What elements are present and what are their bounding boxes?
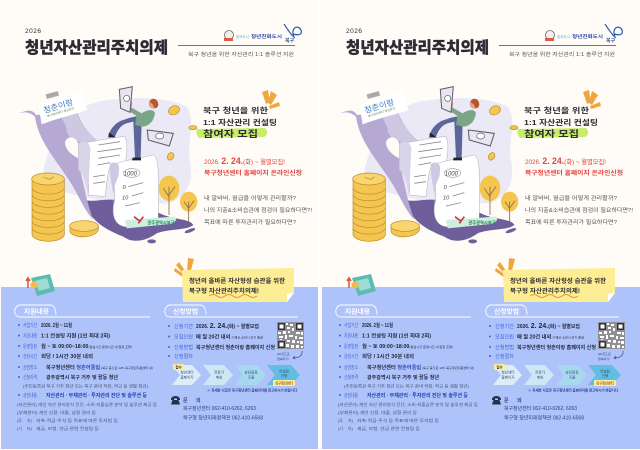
step 1	[493, 364, 522, 385]
step 2: 전문가	[535, 370, 546, 374]
section heading: support details: 지원내용	[345, 306, 370, 316]
QR code	[277, 322, 304, 349]
support detail rows: (부채관리) 개인 신용, 대출, 상환 관리 등	[17, 410, 97, 415]
poster: right copy	[320, 0, 640, 450]
step 2	[203, 365, 233, 385]
support detail rows: (주민등록상 북구 거주 청년 또는 북구 관내 직장, 학교 등 생활 청년)	[344, 384, 470, 388]
section heading: how to apply: 신청방법	[494, 306, 519, 316]
illustration: person on receipts with coins: 1000	[445, 172, 459, 178]
support detail rows: 광주광역시 북구 거주 및 활동 청년	[367, 374, 439, 381]
floating coins	[488, 104, 502, 117]
handwritten questions: 목표에 따른 투자관리가 필요하다면?	[204, 218, 296, 226]
support detail rows: 상담내용	[344, 392, 358, 399]
illustration: person on receipts with coins: 광주광역시북구	[147, 219, 175, 226]
step 4	[588, 365, 621, 386]
yellow callout note: 북구형 자산관리주치의제!	[189, 287, 259, 295]
step 4: 북구청년센터	[596, 380, 614, 386]
red date and application text: 북구청년센터 홈페이지 온라인신청	[204, 169, 302, 177]
support detail rows: 자산관리 · 부채관리 · 투자관리 진단 및 솔루션 등	[46, 392, 147, 399]
intro heading: 1:1 자산관리 컨설팅	[524, 117, 598, 127]
application rows: 신청기간	[174, 323, 193, 330]
section heading: support details: 지원내용	[24, 306, 49, 316]
poster: left copy	[0, 0, 318, 450]
illustration: person on receipts with coins	[18, 87, 197, 243]
support detail rows: 신청자격	[344, 374, 358, 381]
red date and application text	[525, 156, 623, 177]
contact block: 북구청년센터 062-410-6262, 6263	[183, 405, 256, 412]
QR caption and arrow	[598, 351, 623, 361]
yellow callout note: 청년의 올바른 자산형성 습관을 위한	[510, 277, 607, 285]
section: how to apply	[486, 305, 625, 422]
support detail rows: 세금, 보험, 연금 관련 컨설팅 등	[36, 426, 100, 431]
support detail rows: (자산관리) 개인 자산 관리방식 진단, 소비·지출습관 분석 및 솔루션 제공 등	[338, 402, 478, 407]
red date and application text: 2026. 2. 24.(화) ~ 월별모집!	[204, 156, 285, 166]
QR caption and arrow: QR코드로	[277, 352, 290, 356]
support detail rows: 월 ~ 토 09:00~18:00 (점심시간 운영시간 내 일정 조율)	[41, 343, 132, 350]
support detail rows: 상담장소	[23, 364, 37, 371]
section heading: support details	[336, 305, 471, 317]
section: how to apply	[165, 305, 304, 422]
step 1: 접수	[496, 364, 503, 370]
single coin	[70, 221, 98, 237]
step 4: 북구청년센터	[275, 380, 293, 386]
application rows: 신청절차	[174, 353, 193, 360]
floating banknote	[147, 130, 173, 146]
step 1: 청년센터	[180, 370, 194, 374]
intro heading: 북구 청년을 위한	[203, 105, 268, 115]
contact block: 문	[183, 398, 188, 404]
step 1	[172, 364, 201, 385]
application rows: 2026. 2. 24.(화) ~ 월별모집	[517, 323, 580, 330]
support detail rows: 자산관리 · 부채관리 · 투자관리 진단 및 솔루션 등	[367, 392, 468, 399]
subtitle: 북구 청년을 위한 자산관리 1:1 솔루션 지원	[509, 51, 615, 58]
red date and application text: 북구청년센터 홈페이지 온라인신청	[525, 169, 623, 177]
illustration: person on receipts with coins: 10	[443, 195, 450, 201]
step 1: 홈페이지	[501, 374, 515, 380]
blue info panel	[322, 287, 640, 449]
front receipt	[110, 155, 159, 227]
stack of coins	[353, 173, 385, 241]
floor drops	[468, 239, 477, 243]
application rows: 모집인원	[495, 334, 514, 340]
trees	[159, 176, 179, 201]
raised banknote	[119, 87, 132, 112]
orange burst over note	[174, 258, 194, 278]
application rows	[168, 323, 275, 360]
application rows: 신청기간	[495, 323, 514, 330]
section heading: support details	[15, 305, 150, 317]
red date and application text	[204, 156, 302, 177]
support detail rows: 운영일정	[23, 343, 37, 350]
icon: map and coin	[347, 274, 376, 296]
handwritten questions: 내 알바비, 월급을 어떻게 관리할까?	[204, 194, 296, 202]
stack of coins	[32, 173, 64, 241]
application rows	[489, 323, 596, 360]
step 4: 컨설팅	[600, 368, 610, 374]
yellow callout note: 청년의 올바른 자산형성 습관을 위한	[189, 277, 286, 285]
support detail rows: 북구청년센터 청춘어울림 (북구 중흥로 125, 북구청년지원센터 내)	[367, 364, 474, 371]
contact block: 문	[504, 398, 509, 404]
intro heading: 참여자 모집	[203, 128, 258, 139]
orange burst over note	[495, 258, 515, 278]
step 3: 상담일정	[244, 370, 258, 374]
support detail rows: 자)	[27, 418, 33, 423]
support detail rows: 1:1 컨설팅 지원 (1인 최대 2회)	[362, 332, 431, 340]
support detail rows: 운영일정	[344, 343, 358, 350]
handwritten questions	[525, 194, 634, 226]
yellow callout note	[182, 268, 294, 302]
section: support details	[15, 305, 157, 431]
application rows: 신청방법	[174, 344, 193, 351]
support detail rows: 회당 / 1시간 30분 내외	[362, 353, 414, 360]
logo: youth city Buk-gu: 빛의도시	[557, 34, 570, 39]
floating banknote	[468, 130, 494, 146]
support detail rows: (기	[17, 426, 22, 431]
floor drops	[147, 239, 156, 243]
support detail rows: 사업기간	[23, 322, 37, 329]
step 4: 컨설팅	[279, 368, 289, 374]
header rule	[178, 44, 295, 47]
intro heading: 북구 청년을 위한	[524, 105, 589, 115]
year label: 2026	[346, 28, 362, 35]
handwritten questions: 목표에 따른 투자관리가 필요하다면?	[525, 218, 617, 226]
process chevrons	[493, 364, 621, 386]
support detail rows: 사업기간	[344, 322, 358, 329]
QR caption and arrow: 접속하기!	[277, 356, 289, 361]
support detail rows: 저축·적금·주식 등 목표에 따른 투자법 등	[36, 418, 119, 423]
floating coins	[167, 104, 181, 117]
title: 청년자산관리주치의제	[346, 38, 489, 57]
dark purple floor	[404, 200, 514, 241]
logo: youth city Buk-gu	[224, 24, 301, 44]
support detail rows: (자산관리) 개인 자산 관리방식 진단, 소비·지출습관 분석 및 솔루션 제공 등	[17, 402, 157, 407]
orange burst icon	[583, 90, 601, 109]
contact block	[504, 397, 584, 422]
support detail rows: (주민등록상 북구 거주 청년 또는 북구 관내 직장, 학교 등 생활 청년)	[23, 384, 149, 388]
logo: youth city Buk-gu: 빛의도시	[236, 34, 249, 39]
QR caption and arrow	[277, 351, 302, 361]
raised banknote	[440, 87, 453, 112]
support detail rows: 광주광역시 북구 거주 및 활동 청년	[46, 374, 118, 381]
support detail rows: (부채관리) 개인 신용, 대출, 상환 관리 등	[338, 410, 418, 415]
icon: telephone	[171, 396, 180, 404]
handwritten questions: 내 알바비, 월급을 어떻게 관리할까?	[525, 194, 617, 202]
note card: 북구청년센터 청년공간	[367, 105, 396, 118]
back receipt	[78, 137, 127, 197]
blue info panel	[1, 287, 318, 449]
handwritten questions: 나의 지출&소비습관에 점검이 필요하다면?!	[204, 206, 313, 214]
illustration: person on receipts with coins: 10	[122, 195, 129, 201]
title: 청년자산관리주치의제	[25, 38, 168, 57]
step 3: 조율	[248, 374, 255, 380]
red date and application text: 2026. 2. 24.(화) ~ 월별모집!	[525, 156, 606, 166]
QR caption and arrow: QR코드로	[598, 352, 611, 356]
handwritten questions	[204, 194, 313, 226]
back receipt	[399, 137, 448, 197]
step 4: 진행	[602, 373, 608, 378]
trees	[480, 176, 500, 201]
icon: map and coin	[26, 274, 55, 296]
support detail rows: 상담장소	[344, 364, 358, 371]
intro heading	[196, 105, 277, 139]
step 1: 청년센터	[501, 370, 515, 374]
logo: youth city Buk-gu: 북구	[606, 37, 616, 44]
application rows: 2026. 2. 24.(화) ~ 월별모집	[196, 323, 259, 330]
support detail rows: 타)	[27, 426, 33, 431]
support detail rows: 2026. 2월 ~ 11월	[362, 322, 393, 329]
step 1: 접수	[175, 364, 182, 370]
support detail rows: 자)	[348, 418, 354, 423]
support detail rows	[17, 322, 157, 431]
yellow callout note: 북구형 자산관리주치의제!	[510, 287, 580, 295]
support detail rows: 타)	[348, 426, 354, 431]
yellow callout note	[503, 268, 615, 302]
note card: 청춘이랑	[363, 97, 396, 115]
support detail rows	[338, 322, 478, 431]
step 1: 홈페이지	[180, 374, 194, 380]
application rows: 신청방법	[495, 344, 514, 351]
step 3	[235, 365, 266, 385]
illustration: person on receipts with coins	[339, 87, 518, 243]
support detail rows: 2026. 2월 ~ 11월	[41, 322, 72, 329]
illustration: person on receipts with coins: 0	[444, 185, 448, 191]
section: support details	[336, 305, 478, 431]
support detail rows: 북구청년센터 청춘어울림 (북구 중흥로 125, 북구청년지원센터 내)	[46, 364, 153, 371]
subtitle: 북구 청년을 위한 자산관리 1:1 솔루션 지원	[188, 51, 294, 58]
note card: 북구청년센터 청년공간	[46, 105, 75, 118]
front receipt	[431, 155, 480, 227]
logo: youth city Buk-gu: 북구	[285, 37, 295, 44]
illustration: person on receipts with coins: 광주광역시북구	[468, 219, 496, 226]
support detail rows: (투	[338, 418, 343, 423]
contact block: 의	[196, 397, 201, 404]
background blob	[43, 98, 191, 203]
purple paper ribbon	[18, 111, 98, 220]
application rows: 신청절차	[495, 353, 514, 360]
note card	[38, 90, 87, 124]
process footnote: ※ 자세한 사항은 북구청년센터 홈페이지를 참고하시기 바랍니다	[528, 388, 619, 392]
application rows: 북구청년센터 청춘이랑 홈페이지 신청	[517, 344, 596, 351]
person	[429, 116, 463, 158]
logo: youth city Buk-gu	[545, 24, 622, 44]
support detail rows: 저축·적금·주식 등 목표에 따른 투자법 등	[357, 418, 440, 423]
handwritten questions: 나의 지출&소비습관에 점검이 필요하다면?!	[525, 206, 634, 214]
support detail rows: 신청자격	[23, 374, 37, 381]
step 4: 진행	[281, 373, 287, 378]
orange burst icon	[262, 90, 280, 109]
step 2	[524, 365, 554, 385]
dark purple floor	[83, 200, 193, 241]
intro heading: 참여자 모집	[524, 128, 579, 139]
support detail rows: 1:1 컨설팅 지원 (1인 최대 2회)	[41, 332, 110, 340]
support detail rows: (기	[338, 426, 343, 431]
step 2: 매칭	[537, 374, 543, 380]
contact block: 의	[517, 397, 522, 404]
support detail rows: 월 ~ 토 09:00~18:00 (점심시간 운영시간 내 일정 조율)	[362, 343, 453, 350]
logo: youth city Buk-gu: 청년친화도시	[251, 33, 282, 40]
step 3: 상담일정	[565, 370, 579, 374]
purple paper ribbon	[339, 111, 419, 220]
step 4	[267, 365, 300, 386]
QR caption and arrow: 접속하기!	[598, 356, 610, 361]
contact block: 북구형 청년미래정책관 062-410-6568	[504, 414, 584, 422]
district banner	[446, 217, 497, 228]
support detail rows: (투	[17, 418, 22, 423]
support detail rows: 지원내용	[344, 332, 358, 340]
icon: telephone	[492, 396, 501, 404]
step 3	[556, 365, 587, 385]
district banner	[125, 217, 176, 228]
support detail rows: 상담내용	[23, 392, 37, 399]
contact block	[183, 397, 263, 422]
header rule	[499, 44, 616, 47]
support detail rows: 지원내용	[23, 332, 37, 340]
support detail rows: 회당 / 1시간 30분 내외	[41, 353, 93, 360]
person	[108, 116, 142, 158]
application rows: 매 월 20건 내외 ※예산 소진시 조기 종료	[196, 334, 263, 340]
QR code	[598, 322, 625, 349]
process footnote: ※ 자세한 사항은 북구청년센터 홈페이지를 참고하시기 바랍니다	[207, 388, 298, 392]
background blob	[364, 98, 512, 203]
intro heading	[517, 105, 598, 139]
section heading: how to apply: 신청방법	[173, 306, 198, 316]
support detail rows: 세금, 보험, 연금 관련 컨설팅 등	[357, 426, 421, 431]
note card	[359, 90, 408, 124]
application rows: 모집인원	[174, 334, 193, 340]
intro heading: 1:1 자산관리 컨설팅	[203, 117, 277, 127]
step 3: 조율	[569, 374, 576, 380]
support detail rows: 상담시간	[23, 353, 37, 360]
single coin	[391, 221, 419, 237]
process chevrons	[172, 364, 300, 386]
note card: 청춘이랑	[42, 97, 75, 115]
illustration: person on receipts with coins: 1000	[124, 172, 138, 178]
contact block: 북구청년센터 062-410-6262, 6263	[504, 405, 577, 412]
year label: 2026	[25, 28, 41, 35]
application rows: 북구청년센터 청춘이랑 홈페이지 신청	[196, 344, 275, 351]
application rows: 매 월 20건 내외 ※예산 소진시 조기 종료	[517, 334, 584, 340]
illustration: person on receipts with coins: 0	[123, 185, 127, 191]
support detail rows: 상담시간	[344, 353, 358, 360]
step 2: 전문가	[214, 370, 225, 374]
logo: youth city Buk-gu: 청년친화도시	[572, 33, 603, 40]
contact block: 북구형 청년미래정책관 062-410-6568	[183, 414, 263, 422]
step 2: 매칭	[216, 374, 222, 380]
